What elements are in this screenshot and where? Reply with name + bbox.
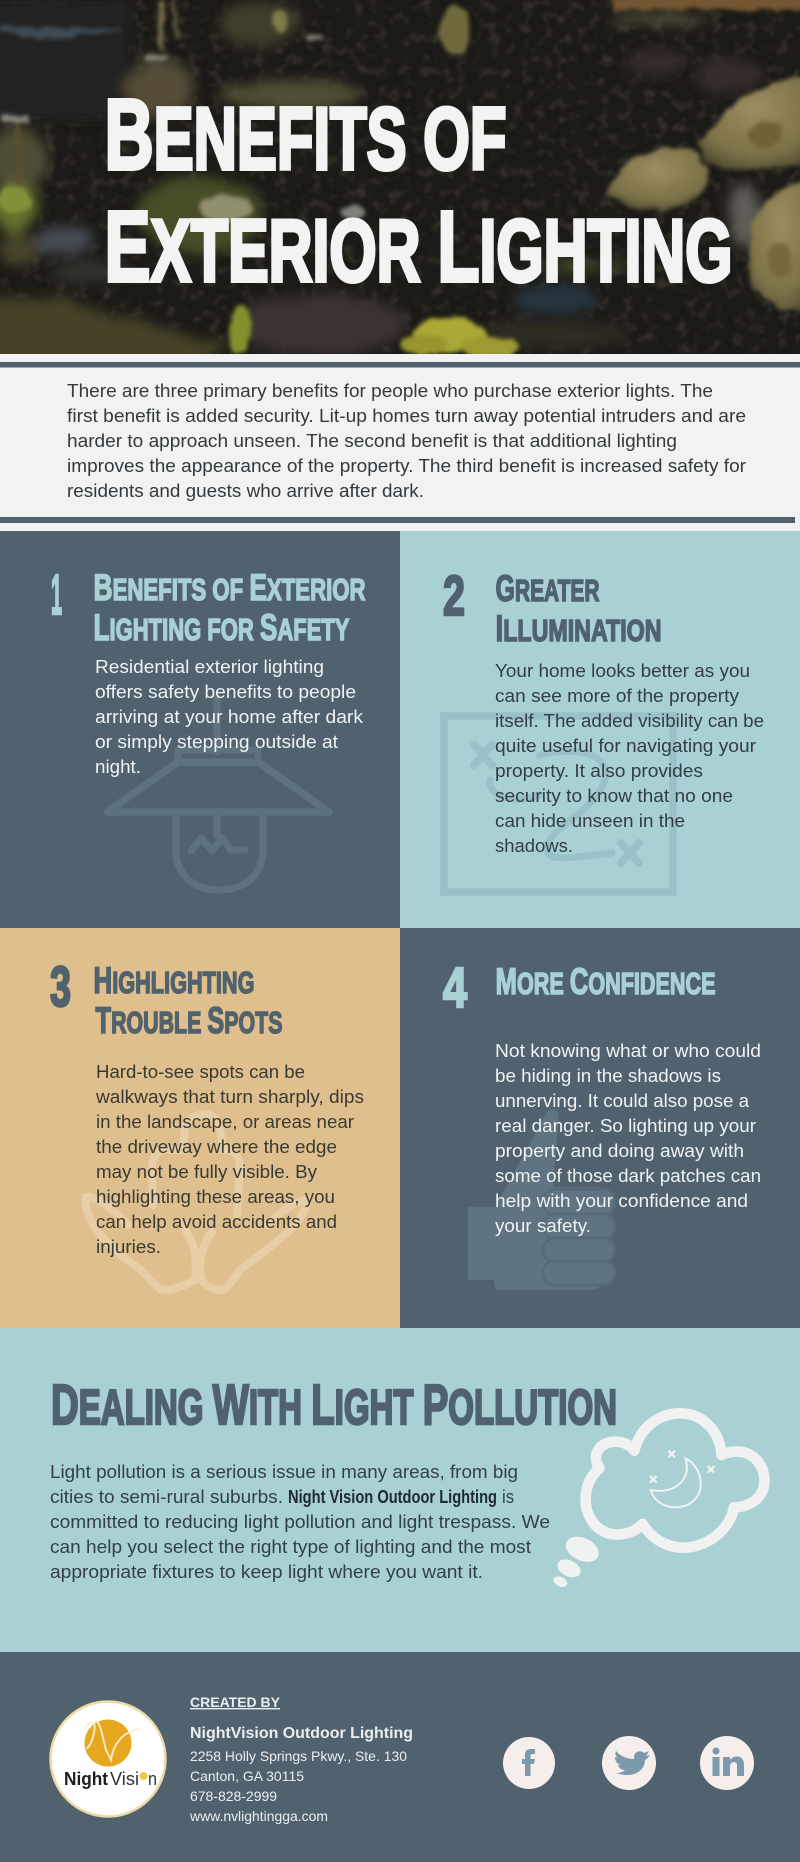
body 2: Your home looks better as you [495,660,750,681]
icon: twitter [602,1736,656,1790]
heading: dealing with light pollution: DEALING WITH LIGHT POLLUTION [51,1373,617,1437]
panel 2: illumination [400,531,800,928]
icon: open hands [86,1114,308,1290]
body 4: property and doing away with [495,1140,744,1161]
heading 2 [496,568,662,649]
body text: appropriate fixtures to keep light where you want it. [50,1561,483,1582]
body 1 [95,656,364,777]
panel: intro [0,354,800,531]
body 3 [95,1061,364,1257]
heading 3 [94,960,282,1041]
body 1: or simply stepping outside at [95,731,338,752]
intro text: There are three primary benefits for people who purchase exterior lights. The [67,380,713,401]
heading 4: MORE CONFIDENCE [496,961,716,1002]
number 3: 3 [50,955,71,1019]
panel 1: safety: 1 [51,563,62,627]
heading 3: TROUBLE SPOTS [96,1000,282,1041]
body 2 [495,660,764,856]
body 2: can see more of the property [495,685,740,706]
body 3: in the landscape, or areas near [96,1111,354,1132]
logo: Visi [110,1769,139,1789]
body text [50,1461,550,1582]
body 3: highlighting these areas, you [96,1186,335,1207]
intro text [67,380,746,501]
title [104,79,732,303]
body text: Night Vision Outdoor Lighting [288,1486,497,1507]
body 1: offers safety benefits to people [95,681,356,702]
footer [0,1652,800,1862]
body text: Light pollution is a serious issue in many areas, from big [50,1461,518,1482]
hero photo: night garden [0,0,800,370]
body 3: injuries. [96,1236,161,1257]
body 2: security to know that no one [495,785,733,806]
intro text: harder to approach unseen. The second benefit is that additional lighting [67,430,677,451]
heading 1: BENEFITS OF EXTERIOR [94,567,366,608]
body 3: can help avoid accidents and [96,1211,337,1232]
heading 2: ILLUMINATION [496,608,662,649]
panel: light pollution [0,1328,800,1652]
panel 3: trouble spots [0,928,400,1328]
body 4: unnerving. It could also pose a [495,1090,750,1111]
body text: can help you select the right type of lighting and the most [50,1536,531,1557]
heading 3: HIGHLIGHTING [94,960,254,1001]
body 1: night. [95,756,141,777]
credits: www.nvlightingga.com [189,1808,328,1824]
credits: 678-828-2999 [190,1788,277,1804]
body 3: may not be fully visible. By [96,1161,318,1182]
panel 1: safety [0,531,400,928]
body 4: real danger. So lighting up your [495,1115,756,1136]
body 2: shadows. [495,835,573,856]
body 1: arriving at your home after dark [95,706,364,727]
panel 4: confidence [400,928,800,1328]
title: BENEFITS OF [104,79,506,191]
body text: is [502,1486,514,1507]
heading 1 [94,567,366,648]
icon: hanging lamp [107,697,329,890]
body 2: itself. The added visibility can be [495,710,764,731]
body 3: walkways that turn sharply, dips [95,1086,364,1107]
logo: Night [64,1769,108,1789]
heading 2: GREATER [496,568,600,609]
body 3: the driveway where the edge [96,1136,337,1157]
body 3: Hard-to-see spots can be [96,1061,305,1082]
intro text: first benefit is added security. Lit-up homes turn away potential intruders and are [67,405,746,426]
body 2: quite useful for navigating your [495,735,756,756]
number 2: 2 [443,564,465,628]
body text: committed to reducing light pollution and light trespass. We [50,1511,550,1532]
body 4 [495,1040,761,1236]
credits [189,1694,413,1824]
credits: NightVision Outdoor Lighting [190,1725,413,1742]
icon: treasure map [444,716,673,892]
intro text: improves the appearance of the property. The third benefit is increased safety for [67,455,746,476]
body 4: help with your confidence and [495,1190,748,1211]
body 4: Not knowing what or who could [495,1040,761,1061]
body 2: can hide unseen in the [495,810,685,831]
body 2: property. It also provides [495,760,703,781]
body 1: Residential exterior lighting [95,656,324,677]
number 4: 4 [443,956,467,1020]
credits: Canton, GA 30115 [190,1768,304,1784]
logo [50,1702,166,1816]
intro text: residents and guests who arrive after dark. [67,480,424,501]
icon: thought cloud with moon [552,1413,764,1589]
body 4: be hiding in the shadows is [495,1065,721,1086]
heading 1: LIGHTING FOR SAFETY [94,607,350,648]
icon: facebook [503,1737,555,1789]
body 4: your safety. [495,1215,591,1236]
body text: cities to semi-rural suburbs. [50,1486,283,1507]
credits: 2258 Holly Springs Pkwy., Ste. 130 [190,1748,407,1764]
body 4: some of those dark patches can [495,1165,761,1186]
logo: n [148,1769,157,1789]
icon: thumbs up [468,1109,615,1290]
icon: linkedin [700,1736,754,1790]
credits: CREATED BY [190,1694,281,1710]
